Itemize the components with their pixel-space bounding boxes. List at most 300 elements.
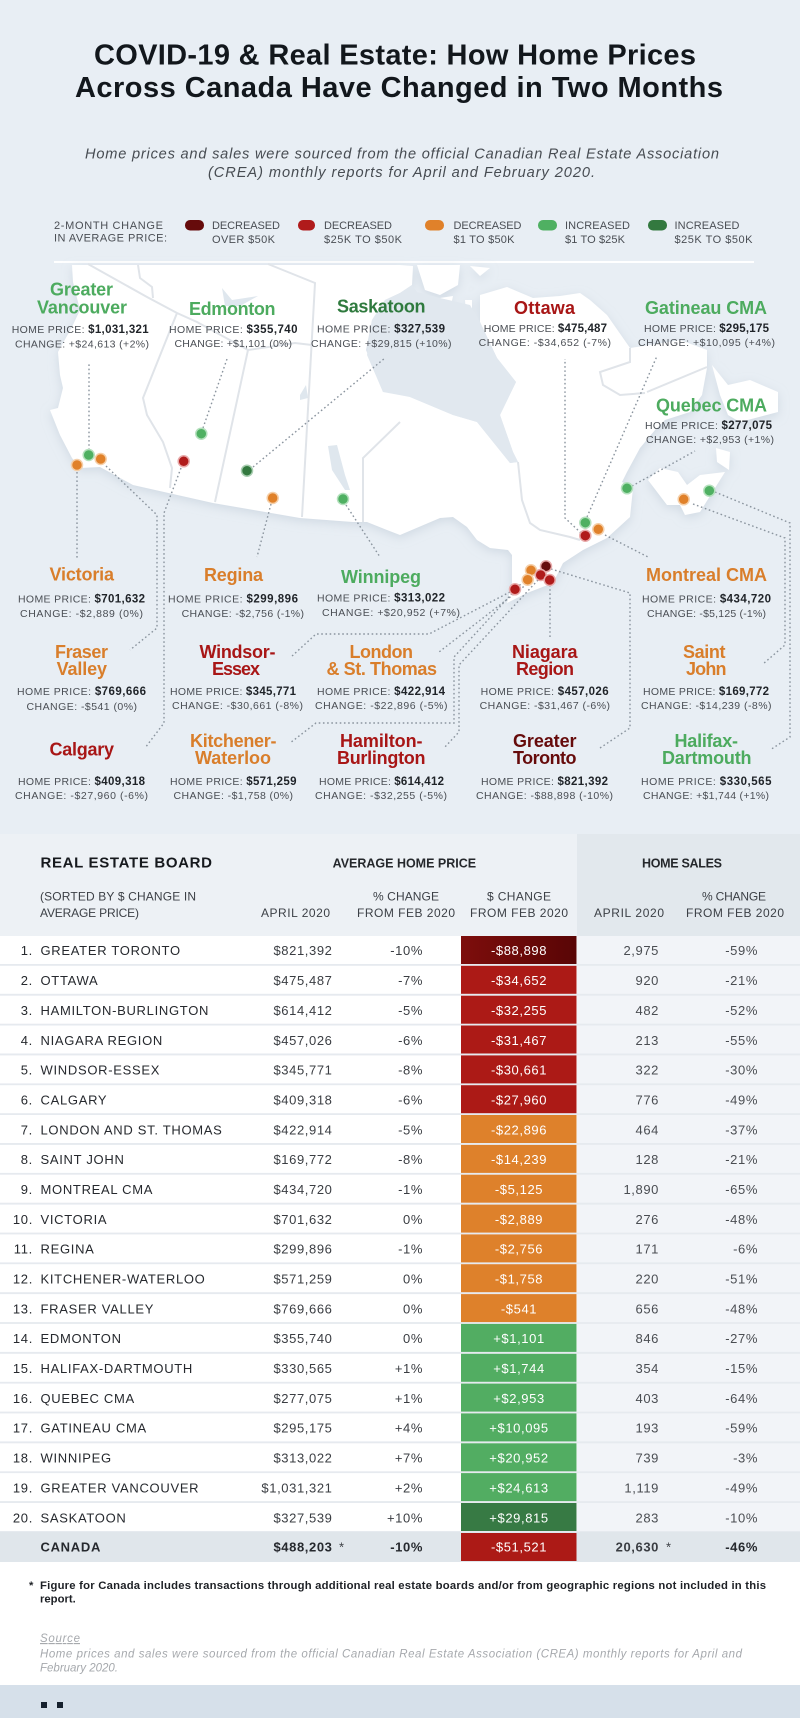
label: London & St. Thomas <box>315 642 448 712</box>
footnote: Figure for Canada includes transactions through additional real estate boards and/or from geographic regions not included in this <box>40 1580 766 1592</box>
row 11: 11. <box>14 1242 33 1257</box>
row 10 <box>0 1205 800 1233</box>
row 20: +$29,815 <box>489 1510 549 1525</box>
legend: $25K TO $50K <box>674 234 753 246</box>
footnote <box>29 1580 766 1606</box>
label: Niagara Region <box>480 642 610 712</box>
row 5: WINDSOR-ESSEX <box>40 1063 160 1078</box>
row 11: -$2,756 <box>495 1242 543 1257</box>
row 15: +1% <box>395 1361 423 1376</box>
label: Halifax-Dartmouth: Dartmouth <box>662 748 752 768</box>
label: Winnipeg: HOME PRICE: $313,022 <box>317 592 445 604</box>
row 16 <box>0 1384 800 1412</box>
label: Montreal CMA <box>642 565 771 620</box>
label: Greater Toronto <box>476 731 613 802</box>
row 19: 19. <box>13 1480 33 1495</box>
row 15: 15. <box>13 1361 33 1376</box>
row 12: KITCHENER-WATERLOO <box>40 1272 206 1286</box>
row 3: 482 <box>636 1003 659 1018</box>
row 17: 193 <box>636 1421 659 1436</box>
legend: $1 TO $25K <box>565 234 626 246</box>
row 16: +$2,953 <box>493 1391 545 1406</box>
label: Kitchener-Waterloo: Waterloo <box>195 748 271 768</box>
row 4: $457,026 <box>273 1033 332 1048</box>
table header: (SORTED BY $ CHANGE IN <box>40 890 196 904</box>
label: Quebec CMA: CHANGE: +$2,953 (+1%) <box>646 434 774 446</box>
provincial borders <box>88 264 707 540</box>
row 16: QUEBEC CMA <box>40 1391 135 1406</box>
row 8: 8. <box>21 1152 33 1167</box>
label: London & St. Thomas: London <box>350 642 413 662</box>
row 16: +1% <box>395 1391 423 1406</box>
label: Niagara Region: Region <box>516 659 574 679</box>
row 14: 14. <box>13 1331 33 1346</box>
label: Kitchener-Waterloo: HOME PRICE: $571,259 <box>170 776 296 788</box>
source: Home prices and sales were sourced from the official Canadian Real Estate Association (CREA) monthly reports for April and <box>40 1649 743 1661</box>
label: Hamilton-Burlington: Hamilton- <box>340 731 422 751</box>
row 12: -51% <box>725 1272 758 1286</box>
label: Calgary: Calgary <box>50 740 114 760</box>
row 4 <box>0 1026 800 1054</box>
row 18 <box>0 1443 800 1471</box>
label: Greater Toronto: Greater <box>513 731 576 751</box>
row 14: -27% <box>725 1331 758 1346</box>
row 7: 7. <box>21 1122 33 1137</box>
label: Victoria <box>18 565 145 620</box>
label: Ottawa: HOME PRICE: $475,487 <box>484 323 607 335</box>
row 7: -5% <box>398 1122 423 1137</box>
map markers <box>72 428 715 595</box>
table header: APRIL 2020 <box>261 906 330 920</box>
row 4: -6% <box>398 1033 423 1048</box>
label: Winnipeg: Winnipeg <box>341 567 421 587</box>
row 5: 322 <box>636 1063 659 1078</box>
label: Fraser Valley: HOME PRICE: $769,666 <box>17 686 146 698</box>
row 10: $701,632 <box>273 1212 332 1227</box>
row 15: $330,565 <box>273 1361 332 1376</box>
legend: OVER $50K <box>212 234 276 246</box>
label: London & St. Thomas: & St. Thomas <box>326 659 437 679</box>
legend: INCREASED <box>674 220 740 232</box>
row 5: -30% <box>725 1063 758 1078</box>
label: Saskatoon: Saskatoon <box>337 297 426 317</box>
legend: INCREASED <box>565 220 630 232</box>
label: Saskatoon: CHANGE: +$29,815 (+10%) <box>311 338 452 350</box>
label: London & St. Thomas: CHANGE: -$22,896 (-5%) <box>315 700 448 712</box>
row 8: SAINT JOHN <box>40 1152 125 1167</box>
row 12: 0% <box>403 1272 423 1286</box>
row 20: -10% <box>725 1510 758 1525</box>
row 2: -$34,652 <box>491 973 547 988</box>
footnote: report. <box>40 1594 76 1606</box>
map of Canada <box>50 264 778 603</box>
label: Windsor-Essex: HOME PRICE: $345,771 <box>170 686 297 698</box>
row 19: +$24,613 <box>489 1480 549 1495</box>
row 2: $475,487 <box>273 973 332 988</box>
legend <box>54 220 753 246</box>
label: Gatineau CMA <box>638 298 775 349</box>
row 4: NIAGARA REGION <box>40 1033 163 1048</box>
row 5: -8% <box>398 1063 423 1078</box>
label: Ottawa: Ottawa <box>514 298 576 318</box>
label: Greater Toronto: Toronto <box>513 748 576 768</box>
label: Gatineau CMA: Gatineau CMA <box>645 298 767 318</box>
label: Victoria: CHANGE: -$2,889 (0%) <box>20 608 143 620</box>
label: Regina: Regina <box>204 565 264 585</box>
row 9: MONTREAL CMA <box>40 1182 153 1197</box>
row 20: SASKATOON <box>40 1510 127 1525</box>
label: Edmonton <box>169 299 298 350</box>
row: Canada total: -46% <box>725 1540 758 1555</box>
row 10: -48% <box>725 1212 758 1227</box>
row 13: -$541 <box>501 1301 537 1316</box>
row 9: -65% <box>725 1182 758 1197</box>
row 1: GREATER TORONTO <box>40 943 181 958</box>
label: Winnipeg: CHANGE: +$20,952 (+7%) <box>322 607 460 619</box>
row 10: -$2,889 <box>495 1212 543 1227</box>
row 19: 1,119 <box>624 1480 659 1495</box>
row 11: REGINA <box>40 1242 95 1257</box>
label: Kitchener-Waterloo <box>170 731 296 802</box>
row 15: +$1,744 <box>493 1361 545 1376</box>
label: Quebec CMA: Quebec CMA <box>656 396 767 416</box>
label: Calgary <box>15 740 148 802</box>
label: Calgary: HOME PRICE: $409,318 <box>18 776 146 788</box>
row 8 <box>0 1145 800 1173</box>
label: Hamilton-Burlington: Burlington <box>337 748 426 768</box>
label: Victoria: HOME PRICE: $701,632 <box>18 594 145 606</box>
leader lines <box>77 356 790 750</box>
title: COVID-19 & Real Estate: How Home Prices <box>94 40 696 72</box>
row 6: 6. <box>21 1092 33 1108</box>
label: Gatineau CMA: CHANGE: +$10,095 (+4%) <box>638 337 775 349</box>
row 13: FRASER VALLEY <box>40 1301 154 1316</box>
label: Halifax-Dartmouth <box>641 731 772 802</box>
label: Greater Vancouver: Greater <box>50 280 113 300</box>
label: Niagara Region: CHANGE: -$31,467 (-6%) <box>480 700 610 712</box>
row 3 <box>0 996 800 1024</box>
row 15: 354 <box>636 1361 659 1376</box>
table header <box>40 834 800 936</box>
row 7 <box>0 1115 800 1143</box>
row 19: $1,031,321 <box>261 1480 332 1495</box>
row: Canada total <box>0 1532 800 1562</box>
row: Canada total: -10% <box>390 1540 423 1555</box>
row 15: -15% <box>725 1361 758 1376</box>
row 19: GREATER VANCOUVER <box>40 1480 199 1495</box>
label: London & St. Thomas: HOME PRICE: $422,914 <box>317 686 446 698</box>
row 6: $409,318 <box>273 1092 332 1108</box>
row 2: -21% <box>725 973 758 988</box>
row 17: +4% <box>395 1421 423 1436</box>
row 8: -8% <box>398 1152 423 1167</box>
row 15 <box>0 1354 800 1382</box>
row 15: HALIFAX-DARTMOUTH <box>40 1361 193 1376</box>
row: Canada total: -$51,521 <box>491 1540 547 1555</box>
row 14: 0% <box>403 1331 423 1346</box>
row: Canada total: $488,203 <box>273 1540 332 1555</box>
row 5: 5. <box>21 1063 33 1078</box>
label: Kitchener-Waterloo: CHANGE: -$1,758 (0%) <box>174 790 293 802</box>
label: Hamilton-Burlington: CHANGE: -$32,255 (-5%) <box>315 790 447 802</box>
row 18: +$20,952 <box>489 1451 549 1466</box>
label: Windsor-Essex: Essex <box>212 659 260 679</box>
row 18: $313,022 <box>273 1451 332 1466</box>
legend: DECREASED <box>454 220 522 232</box>
legend: 2-MONTH CHANGE <box>54 220 163 232</box>
row 14: +$1,101 <box>493 1331 545 1346</box>
label: Hamilton-Burlington: HOME PRICE: $614,412 <box>319 776 444 788</box>
row 20: 283 <box>636 1510 659 1525</box>
row 3: $614,412 <box>273 1003 332 1018</box>
row 5 <box>0 1055 800 1083</box>
row 12: $571,259 <box>273 1272 332 1286</box>
table header: % CHANGE <box>373 890 439 904</box>
row 9: 1,890 <box>623 1182 659 1197</box>
row 19: +2% <box>395 1480 423 1495</box>
row 6: -49% <box>725 1092 758 1108</box>
row: Canada total: * <box>666 1540 672 1555</box>
row 9: $434,720 <box>273 1182 332 1197</box>
table header: HOME SALES <box>642 856 722 870</box>
row 13: 0% <box>403 1301 423 1316</box>
label: Greater Toronto: CHANGE: -$88,898 (-10%) <box>476 790 613 802</box>
row 17: 17. <box>13 1421 33 1436</box>
row 12: 220 <box>636 1272 659 1286</box>
label: Fraser Valley <box>17 642 146 713</box>
row 3: -5% <box>398 1003 423 1018</box>
label: Greater Vancouver: CHANGE: +$24,613 (+2%) <box>15 339 149 351</box>
label: Greater Vancouver <box>12 280 149 351</box>
table header: FROM FEB 2020 <box>357 906 455 920</box>
label: Saint John <box>641 642 772 712</box>
label: Fraser Valley: Fraser <box>55 642 108 662</box>
label: Saint John: Saint <box>683 642 726 662</box>
table body <box>0 936 800 1562</box>
row 2: -7% <box>398 973 423 988</box>
row 17: -59% <box>725 1421 758 1436</box>
label: Saint John: HOME PRICE: $169,772 <box>643 686 769 698</box>
row 1: -59% <box>725 943 758 958</box>
row 9: -1% <box>398 1182 423 1197</box>
table header: % CHANGE <box>702 890 766 904</box>
row 14: 846 <box>636 1331 659 1346</box>
row 1: 2,975 <box>623 943 659 958</box>
row 20: +10% <box>387 1510 423 1525</box>
source: February 2020. <box>40 1663 118 1675</box>
label: Quebec CMA <box>645 396 774 446</box>
row 18: WINNIPEG <box>40 1451 112 1466</box>
label: Halifax-Dartmouth: HOME PRICE: $330,565 <box>641 776 772 788</box>
row 12: -$1,758 <box>495 1272 543 1286</box>
title <box>75 40 723 104</box>
label: Calgary: CHANGE: -$27,960 (-6%) <box>15 790 148 802</box>
row 12: 12. <box>13 1272 33 1286</box>
row 6: -6% <box>398 1092 423 1108</box>
row 4: -$31,467 <box>491 1033 547 1048</box>
table header: $ CHANGE <box>487 890 551 904</box>
row 2: OTTAWA <box>40 973 98 988</box>
label: Ottawa <box>479 298 611 349</box>
row 7: LONDON AND ST. THOMAS <box>40 1122 223 1137</box>
legend: DECREASED <box>324 220 392 232</box>
label: Halifax-Dartmouth: Halifax- <box>674 731 738 751</box>
row 10: 0% <box>403 1212 423 1227</box>
row 17 <box>0 1413 800 1441</box>
label: Fraser Valley: Valley <box>57 659 107 679</box>
row 7: 464 <box>636 1122 659 1137</box>
label: Gatineau CMA: HOME PRICE: $295,175 <box>644 323 770 335</box>
row 6: CALGARY <box>40 1092 107 1108</box>
footer band <box>0 1685 800 1718</box>
row 1: -10% <box>390 943 423 958</box>
row 3: 3. <box>21 1003 33 1018</box>
row 13: $769,666 <box>273 1301 332 1316</box>
label: Fraser Valley: CHANGE: -$541 (0%) <box>26 701 137 713</box>
label: Saint John: CHANGE: -$14,239 (-8%) <box>641 700 772 712</box>
row 8: 128 <box>636 1152 659 1167</box>
row 14: $355,740 <box>273 1331 332 1346</box>
row 18: 739 <box>636 1451 659 1466</box>
table header: APRIL 2020 <box>594 906 664 920</box>
subtitle: (CREA) monthly reports for April and February 2020. <box>208 165 595 181</box>
row 4: -55% <box>725 1033 758 1048</box>
row 1: $821,392 <box>273 943 332 958</box>
row 5: -$30,661 <box>491 1063 547 1078</box>
row 18: +7% <box>395 1451 423 1466</box>
table header: REAL ESTATE BOARD <box>40 855 212 872</box>
label: Regina: HOME PRICE: $299,896 <box>168 594 298 606</box>
row 18: -3% <box>733 1451 758 1466</box>
row 20 <box>0 1503 800 1531</box>
row 2: 920 <box>636 973 659 988</box>
legend: IN AVERAGE PRICE: <box>54 232 167 244</box>
label: Niagara Region: HOME PRICE: $457,026 <box>481 686 609 698</box>
row 9 <box>0 1175 800 1203</box>
legend: $1 TO $50K <box>454 234 515 246</box>
row 18: 18. <box>13 1451 33 1466</box>
row 8: -21% <box>725 1152 758 1167</box>
label: Kitchener-Waterloo: Kitchener- <box>190 731 276 751</box>
table header: AVERAGE PRICE) <box>40 906 139 920</box>
label: Windsor-Essex <box>170 642 303 712</box>
label: Niagara Region: Niagara <box>512 642 578 662</box>
row 13 <box>0 1294 800 1322</box>
table header: FROM FEB 2020 <box>686 906 784 920</box>
row 19: -49% <box>725 1480 758 1495</box>
row 3: -52% <box>725 1003 758 1018</box>
row 1 <box>0 936 800 964</box>
title: Across Canada Have Changed in Two Months <box>75 72 723 104</box>
label: Regina <box>168 565 304 620</box>
row 13: 13. <box>13 1301 33 1316</box>
label: Edmonton: Edmonton <box>189 299 276 319</box>
label: Halifax-Dartmouth: CHANGE: +$1,744 (+1%) <box>643 790 769 802</box>
row 10: 10. <box>13 1212 33 1227</box>
row 2: 2. <box>21 973 33 988</box>
row 7: $422,914 <box>273 1122 332 1137</box>
row 11: -1% <box>398 1242 423 1257</box>
row: Canada total: * <box>339 1540 345 1555</box>
row 12 <box>0 1264 800 1292</box>
row 20: 20. <box>13 1510 33 1525</box>
label: Ottawa: CHANGE: -$34,652 (-7%) <box>479 337 611 349</box>
row 4: 4. <box>21 1033 33 1048</box>
row 17: +$10,095 <box>489 1421 549 1436</box>
row 8: $169,772 <box>273 1152 332 1167</box>
label: Victoria: Victoria <box>50 565 115 585</box>
row 3: HAMILTON-BURLINGTON <box>40 1003 209 1018</box>
legend: DECREASED <box>212 220 280 232</box>
label: Edmonton: CHANGE: +$1,101 (0%) <box>174 338 292 350</box>
row 3: -$32,255 <box>491 1003 547 1018</box>
label: Saskatoon <box>311 297 452 350</box>
subtitle <box>85 146 719 181</box>
label: Greater Vancouver: Vancouver <box>37 298 127 318</box>
label: Greater Toronto: HOME PRICE: $821,392 <box>481 776 608 788</box>
row 7: -$22,896 <box>491 1122 547 1137</box>
label: Saskatoon: HOME PRICE: $327,539 <box>317 324 445 336</box>
row 1: -$88,898 <box>491 943 547 958</box>
row 6: -$27,960 <box>491 1092 547 1108</box>
row 16: 16. <box>13 1391 33 1406</box>
label: Montreal CMA: Montreal CMA <box>646 565 767 585</box>
row 20: $327,539 <box>273 1510 332 1525</box>
label: Greater Vancouver: HOME PRICE: $1,031,321 <box>12 324 149 336</box>
row: Canada total: 20,630 <box>616 1540 659 1555</box>
table header: AVERAGE HOME PRICE <box>333 856 476 870</box>
label: Saint John: John <box>686 659 726 679</box>
row 11 <box>0 1234 800 1262</box>
label: Windsor-Essex: Windsor- <box>200 642 276 662</box>
label: Hamilton-Burlington <box>315 731 447 802</box>
row 13: -48% <box>725 1301 758 1316</box>
row 8: -$14,239 <box>491 1152 547 1167</box>
row 6: 776 <box>636 1092 659 1108</box>
row 9: -$5,125 <box>495 1182 543 1197</box>
row 17: $295,175 <box>273 1421 332 1436</box>
row 16: -64% <box>725 1391 758 1406</box>
row: Canada total: CANADA <box>40 1540 101 1555</box>
row 14 <box>0 1324 800 1352</box>
label: Quebec CMA: HOME PRICE: $277,075 <box>645 420 773 432</box>
source: Source <box>40 1633 80 1645</box>
row 7: -37% <box>725 1122 758 1137</box>
row 5: $345,771 <box>273 1063 332 1078</box>
row 2 <box>0 966 800 994</box>
footnote: * <box>29 1580 34 1592</box>
label: Windsor-Essex: CHANGE: -$30,661 (-8%) <box>172 700 303 712</box>
row 10: 276 <box>636 1212 659 1227</box>
row 4: 213 <box>636 1033 659 1048</box>
legend: $25K TO $50K <box>324 234 403 246</box>
row 19 <box>0 1473 800 1501</box>
row 17: GATINEAU CMA <box>40 1421 147 1436</box>
row 6 <box>0 1085 800 1113</box>
row 1: 1. <box>21 943 33 958</box>
row 16: $277,075 <box>273 1391 332 1406</box>
table header: FROM FEB 2020 <box>470 906 568 920</box>
row 9: 9. <box>21 1182 33 1197</box>
row 11: -6% <box>733 1242 758 1257</box>
label: Montreal CMA: CHANGE: -$5,125 (-1%) <box>647 608 766 620</box>
label: Winnipeg <box>317 567 460 619</box>
row 11: $299,896 <box>273 1242 332 1257</box>
row 10: VICTORIA <box>40 1212 107 1227</box>
row 16: 403 <box>636 1391 659 1406</box>
label: Montreal CMA: HOME PRICE: $434,720 <box>642 594 771 606</box>
row 11: 171 <box>636 1242 659 1257</box>
